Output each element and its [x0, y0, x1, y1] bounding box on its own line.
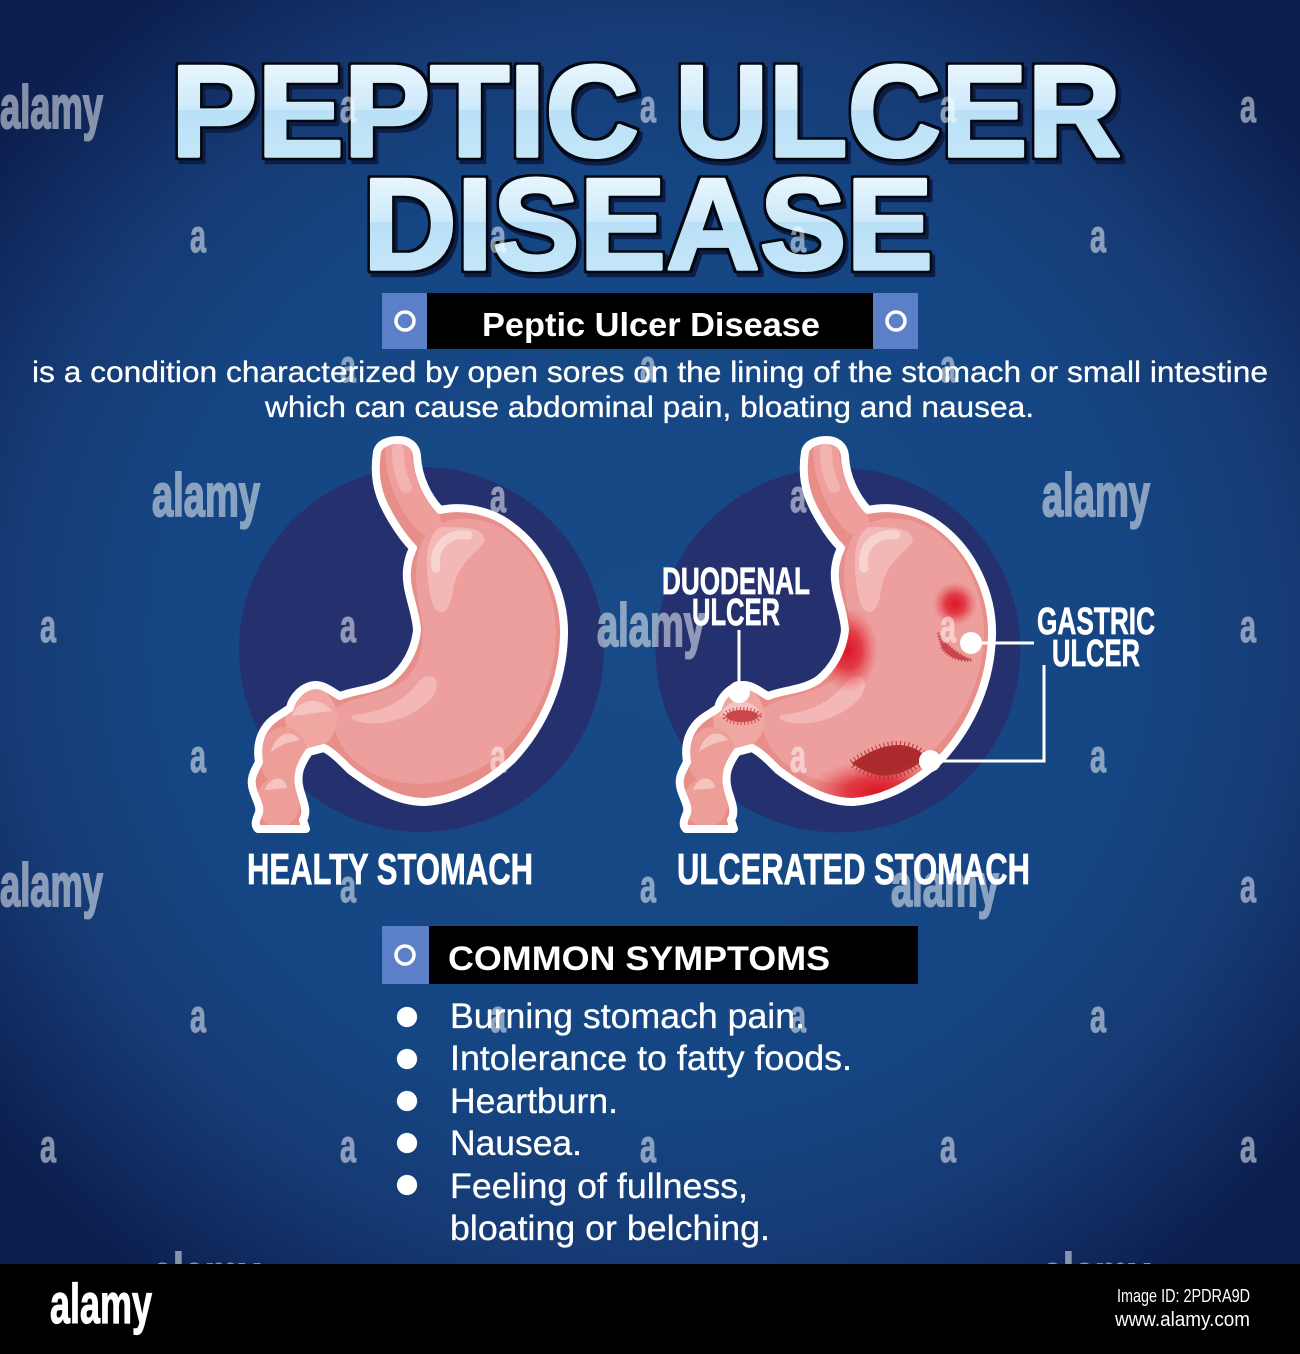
header bar: Peptic Ulcer Disease — [382, 293, 918, 349]
text: alamy — [1042, 462, 1150, 529]
title: DISEASE — [363, 151, 933, 297]
watermarks: a — [790, 210, 806, 262]
text: alamy — [1042, 1242, 1150, 1309]
symptoms list: Nausea. — [450, 1124, 582, 1163]
illustration: ulcerated stomach — [680, 440, 992, 829]
watermarks: a — [340, 600, 356, 652]
watermarks: a — [1240, 1120, 1256, 1172]
watermarks: a — [1090, 210, 1106, 262]
watermarks: a — [1090, 730, 1106, 782]
symptoms list: Feeling of fullness, — [450, 1167, 748, 1206]
watermarks: a — [490, 730, 506, 782]
symptoms list: bloating or belching. — [450, 1209, 770, 1248]
description text: is a condition characterized by open sores on the lining of the stomach or small intestine — [32, 356, 1268, 389]
illustration: healthy stomach — [252, 440, 564, 829]
footer bar: www.alamy.com — [1114, 1309, 1250, 1331]
callout: duodenal ulcer: ULCER — [692, 592, 780, 634]
backdrop circle: ulcerated — [656, 468, 1020, 832]
watermarks: a — [790, 990, 806, 1042]
heading: common symptoms — [382, 926, 918, 984]
watermarks: a — [490, 470, 506, 522]
panel: ulcerated stomach — [656, 440, 1155, 894]
watermarks: a — [790, 470, 806, 522]
watermarks: a — [640, 860, 656, 912]
text: alamy — [0, 74, 103, 141]
watermarks: a — [340, 80, 356, 132]
callout: duodenal ulcer — [662, 561, 810, 703]
footer bar: Image ID: 2PDRA9D — [1117, 1286, 1250, 1306]
text: alamy — [152, 462, 260, 529]
watermarks: a — [190, 210, 206, 262]
label: healthy stomach: HEALTY STOMACH — [247, 845, 533, 894]
symptoms list: Intolerance to fatty foods. — [450, 1039, 852, 1078]
footer bar — [0, 1264, 1300, 1354]
description text: which can cause abdominal pain, bloating and nausea. — [264, 391, 1034, 424]
watermarks: a — [940, 600, 956, 652]
watermarks: a — [790, 730, 806, 782]
watermarks: a — [640, 340, 656, 392]
footer bar: alamy — [50, 1272, 152, 1335]
watermarks: a — [940, 80, 956, 132]
title — [171, 38, 1121, 297]
watermarks: a — [640, 80, 656, 132]
watermarks — [40, 80, 1256, 1172]
watermarks: a — [640, 1120, 656, 1172]
callout: gastric ulcer: GASTRIC — [1037, 601, 1155, 643]
symptoms list: Burning stomach pain. — [450, 997, 805, 1036]
watermarks: a — [340, 340, 356, 392]
watermarks: a — [1240, 80, 1256, 132]
panel: healthy stomach — [239, 440, 604, 894]
symptoms list — [397, 997, 852, 1248]
watermarks: a — [1090, 990, 1106, 1042]
watermarks: a — [490, 990, 506, 1042]
label: ulcerated stomach: ULCERATED STOMACH — [677, 845, 1030, 894]
title: PEPTIC ULCER — [171, 38, 1121, 184]
watermarks: a — [940, 340, 956, 392]
watermarks: a — [340, 1120, 356, 1172]
watermarks: a — [490, 210, 506, 262]
text: alamy — [152, 1242, 260, 1309]
watermarks: a — [940, 1120, 956, 1172]
watermarks: a — [1240, 860, 1256, 912]
callout: gastric ulcer — [919, 601, 1155, 772]
watermarks: a — [190, 730, 206, 782]
text: alamy — [0, 852, 103, 919]
watermarks: a — [340, 860, 356, 912]
text: alamy — [891, 852, 999, 919]
heading: common symptoms: COMMON SYMPTOMS — [448, 940, 830, 978]
watermarks: a — [40, 1120, 56, 1172]
watermarks: a — [40, 600, 56, 652]
watermarks: a — [1240, 600, 1256, 652]
symptoms list: Heartburn. — [450, 1082, 618, 1121]
backdrop circle: healthy — [239, 467, 604, 832]
callout: gastric ulcer: ULCER — [1052, 633, 1140, 675]
callout: duodenal ulcer: DUODENAL — [662, 561, 810, 603]
description text — [32, 356, 1268, 424]
text: alamy — [597, 592, 705, 659]
header bar: Peptic Ulcer Disease: Peptic Ulcer Disease — [482, 306, 820, 343]
watermarks: a — [190, 990, 206, 1042]
